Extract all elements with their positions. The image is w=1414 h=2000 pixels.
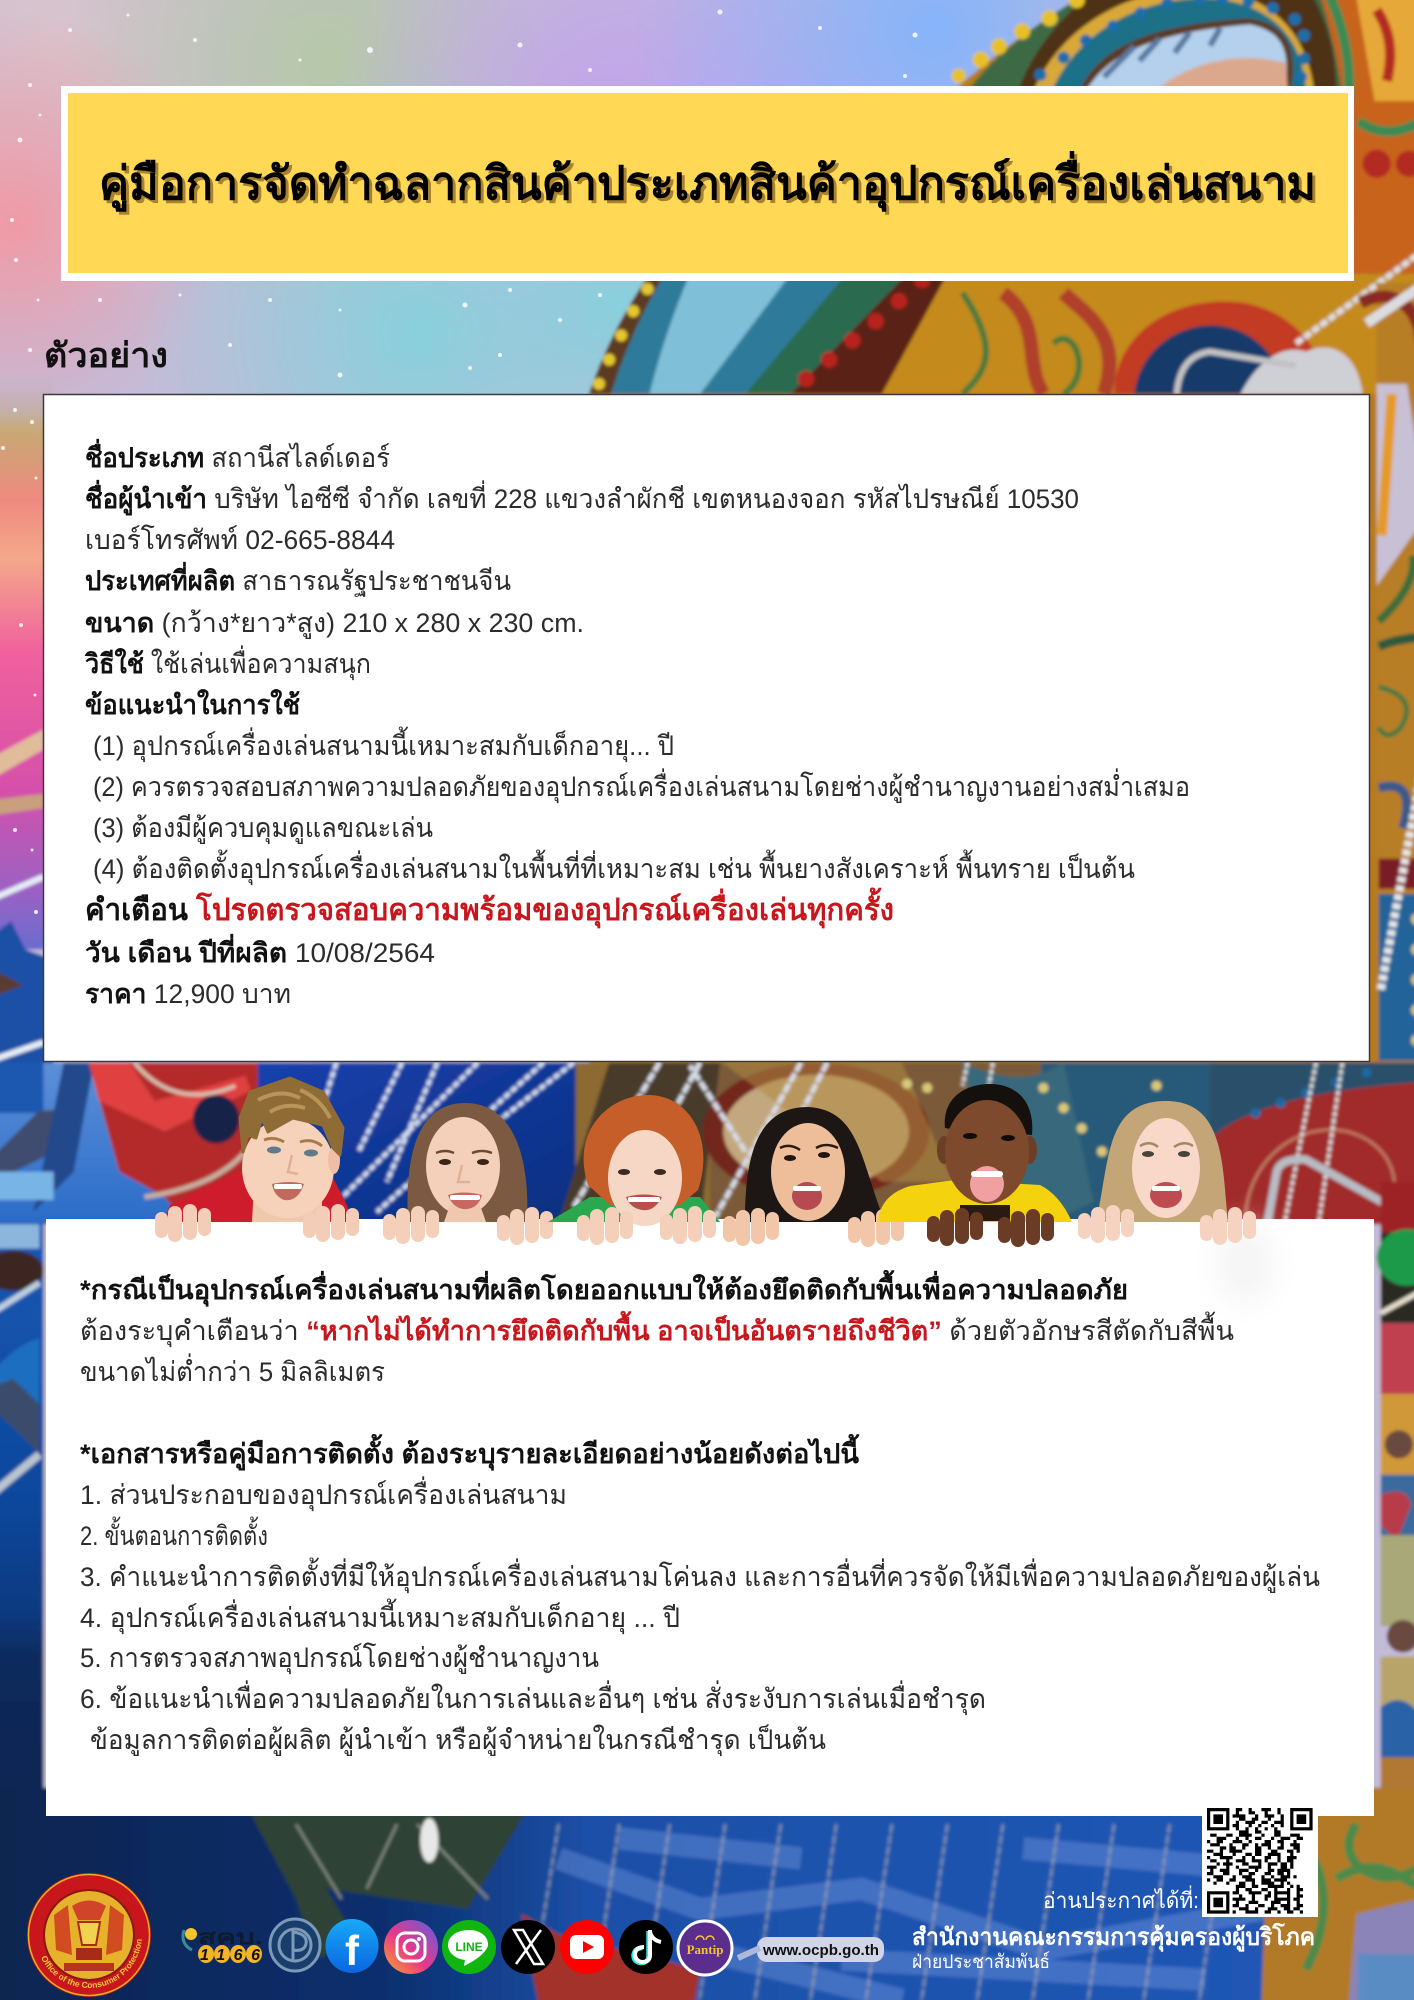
carousel below title [589,274,1414,394]
child 2 [383,1103,553,1245]
line: price: ราคา 12,900 บาท [85,979,291,1009]
child 3 [548,1095,720,1245]
panel: label example [44,394,1370,1062]
title text: คู่มือการจัดทำฉลากสินค้าประเภทสินค้าอุปกรณ์เครื่องเล่นสนาม [99,151,1316,212]
line: warning: คำเตือน โปรดตรวจสอบความพร้อมของอุปกรณ์เครื่องเล่นทุกครั้ง [85,887,894,929]
list item 2: 2. ขั้นตอนการติดตั้ง [80,1516,268,1551]
child 5 [878,1084,1072,1247]
line: how to use: วิธีใช้ ใช้เล่นเพื่อความสนุก [84,645,371,681]
icon: instagram [384,1920,438,1974]
child 4 [723,1107,904,1247]
children peeking over panel [155,1078,1256,1247]
line: phone: เบอร์โทรศัพท์ 02-665-8844 [85,524,395,555]
panel: installation requirements [46,1219,1374,1816]
left edge fantasy strip [0,921,54,1071]
icon: tiktok [619,1920,673,1974]
icon: OCPB circle [270,1919,320,1971]
icon: hotline 1166: 1166 [200,1947,260,1964]
note: anchoring heading: *กรณีเป็นอุปกรณ์เครื่องเล่นสนามที่ผลิตโดยออกแบบให้ต้องยึดติดกับพื้นเพื่อความปลอดภัย [80,1269,1128,1307]
carousel top [589,0,1414,1071]
icon: pantip [678,1921,732,1975]
icon: facebook [326,1919,378,1974]
stars [1,10,918,914]
list item 6 continued: ข้อมูลการติดต่อผู้ผลิต ผู้นำเข้า หรือผู้จำหน่ายในกรณีชำรุด เป็นต้น [90,1722,826,1757]
list item 3: 3. คำแนะนำการติดตั้งที่มีให้อุปกรณ์เครื่องเล่นสนามโค่นลง และการอื่นที่ควรจัดให้มีเพื่อความปลอดภัยของผู้เล่น [80,1557,1320,1594]
icon: hotline 1166: สคบ. [198,1927,263,1949]
title banner [61,86,1354,281]
icon: line [442,1920,496,1974]
list item 1: 1. ส่วนประกอบของอุปกรณ์เครื่องเล่นสนาม [80,1476,567,1512]
bottom band background [0,1788,1414,2000]
line: country: ประเทศที่ผลิต สาธารณรัฐประชาชนจีน [85,561,511,597]
icon: OCPB seal: Office of the Consumer Protection Board [42,1939,142,1988]
line: advice heading: ข้อแนะนำในการใช้ [85,689,300,720]
line: production date: วัน เดือน ปีที่ผลิต 10/08/2564 [85,933,435,968]
website pill [738,1937,884,1962]
child 6 [1078,1101,1256,1245]
list item 4: 4. อุปกรณ์เครื่องเล่นสนามนี้เหมาะสมกับเด็กอายุ ... ปี [80,1598,680,1635]
child 1 [155,1078,359,1242]
website pill: www.ocpb.go.th [762,1942,879,1959]
line: product type: ชื่อประเภท สถานีสไลด์เดอร์ [85,438,390,473]
list item 6: 6. ข้อแนะนำเพื่อความปลอดภัยในการเล่นและอื่นๆ เช่น สั่งระงับการเล่นเมื่อชำรุด [80,1680,986,1716]
icon: OCPB seal [27,1873,151,1997]
line: advice 2: (2) ควรตรวจสอบสภาพความปลอดภัยของอุปกรณ์เครื่องเล่นสนามโดยช่างผู้ชำนาญงานอย่างสม่ำเสมอ [93,768,1190,804]
line: size: ขนาด (กว้าง*ยาว*สูง) 210 x 280 x 230 cm. [85,608,584,639]
lower side strips [0,1222,43,1848]
QR caption: อ่านประกาศได้ที่: [1043,1885,1199,1913]
note: minimum size: ขนาดไม่ต่ำกว่า 5 มิลลิเมตร [80,1353,385,1387]
section heading: example: ตัวอย่าง [44,337,168,375]
QR code [1202,1803,1318,1917]
right edge painted strip [1377,283,1414,1071]
icon: facebook: f [345,1927,360,1974]
list item 5: 5. การตรวจสภาพอุปกรณ์โดยช่างผู้ชำนาญงาน [80,1642,599,1675]
department: ฝ่ายประชาสัมพันธ์ [912,1951,1050,1973]
line: advice 1: (1) อุปกรณ์เครื่องเล่นสนามนี้เหมาะสมกับเด็กอายุ... ปี [93,726,674,763]
line: advice 3: (3) ต้องมีผู้ควบคุมดูแลขณะเล่น [93,813,433,845]
icon: youtube [560,1920,614,1974]
list heading: documents: *เอกสารหรือคู่มือการติดตั้ง ต้องระบุรายละเอียดอย่างน้อยดังต่อไปนี้ [80,1433,860,1471]
icon: X [501,1920,555,1974]
icon: hotline 1166 [183,1927,263,1964]
icon: pantip: Pantip [687,1942,723,1957]
line: importer: ชื่อผู้นำเข้า บริษัท ไอซีซี จำกัด เลขที่ 228 แขวงลำผักชี เขตหนองจอก รหัสไปรษณีย์ 10530 [85,479,1079,516]
mid band background [0,1063,195,1224]
note: required warning: ต้องระบุคำเตือนว่า “หากไม่ได้ทำการยึดติดกับพื้น อาจเป็นอันตรายถึงชีวิต” ด้วยตัวอักษรสีตัดกับสีพื้น [80,1310,1234,1348]
icon: line: LINE [455,1940,483,1954]
line: advice 4: (4) ต้องติดตั้งอุปกรณ์เครื่องเล่นสนามในพื้นที่ที่เหมาะสม เช่น พื้นยางสังเคราะห์ พื้นทราย เป็นต้น [93,849,1135,886]
office name: สำนักงานคณะกรรมการคุ้มครองผู้บริโภค [912,1922,1315,1953]
